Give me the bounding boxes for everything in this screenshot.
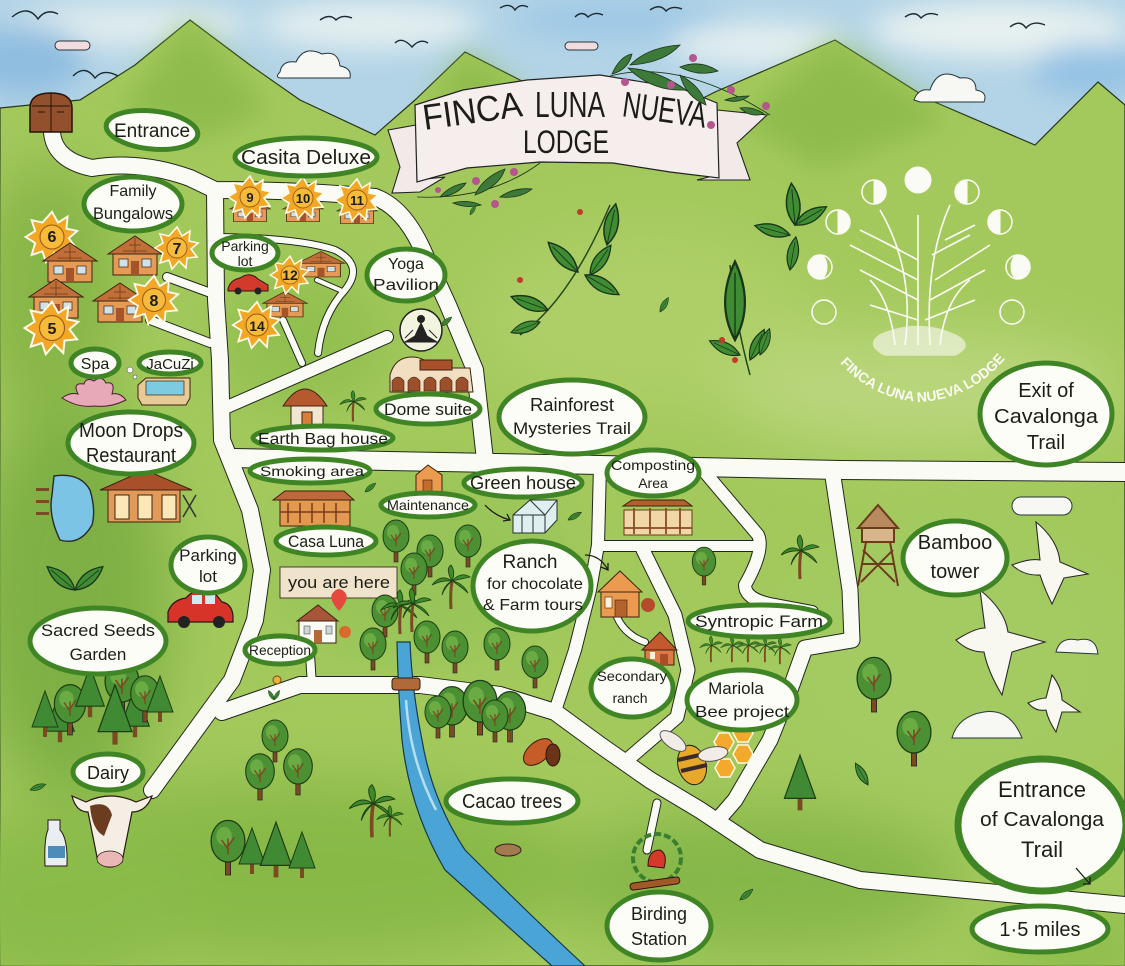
label: Mariola Bee project	[687, 670, 797, 730]
label: Cacao trees: Cacao trees	[462, 791, 562, 813]
label: Bamboo tower: Bamboo	[918, 532, 992, 554]
label: Ranch for chocolate and farm tours: Ranch	[503, 552, 557, 573]
label: Reception: Reception	[249, 642, 311, 658]
label: Secondary ranch	[591, 659, 673, 717]
you are here sign	[280, 567, 397, 611]
you are here sign: you are here	[288, 573, 390, 592]
label: Yoga Pavilion: Pavilion	[373, 277, 439, 294]
label: Earth Bag house	[253, 426, 393, 450]
bungalow numbers	[48, 229, 182, 338]
label: Green house: Green house	[470, 473, 576, 493]
label: Casa Luna: Casa Luna	[288, 532, 364, 551]
clouds and birds	[12, 5, 1098, 738]
label: Ranch for chocolate and farm tours: & Farm tours	[483, 597, 583, 614]
earth bag house	[283, 389, 366, 426]
label: Sacred Seeds Garden: Sacred Seeds	[41, 621, 155, 640]
label: Entrance of Cavalonga Trail: Trail	[1021, 837, 1063, 862]
family bungalows	[24, 212, 198, 354]
label: Bamboo tower: tower	[931, 561, 980, 583]
label: 1.5 miles: 1·5 miles	[999, 919, 1081, 941]
roads	[52, 132, 1125, 905]
secondary ranch house	[642, 632, 677, 665]
label: Parking lot	[171, 537, 245, 593]
label: Casita Deluxe	[235, 138, 377, 176]
banner leaves	[417, 45, 770, 208]
label: Maintenance: Maintenance	[387, 497, 469, 513]
label: Exit of Cavalonga Trail	[980, 363, 1112, 465]
label: Parking lot: lot	[199, 567, 217, 586]
right side trees	[784, 657, 931, 810]
botanical illustrations	[29, 183, 872, 902]
label: Smoking area: Smoking area	[260, 463, 364, 479]
greenhouse	[513, 500, 583, 533]
small rocks	[495, 844, 521, 856]
label: Entrance	[104, 106, 200, 154]
label: Mariola Bee project: Bee project	[695, 704, 790, 721]
label: Syntropic Farm	[688, 605, 830, 637]
dome suite	[390, 357, 473, 392]
label: Secondary ranch: ranch	[612, 690, 648, 706]
label: Moon Drops Restaurant: Restaurant	[86, 445, 176, 467]
casita deluxe cabins: 11	[350, 193, 364, 208]
dairy cow and bottle	[45, 796, 152, 867]
label: Mariola Bee project: Mariola	[708, 679, 764, 698]
label: Exit of Cavalonga Trail: Exit of	[1018, 380, 1074, 402]
label: Sacred Seeds Garden	[30, 608, 166, 674]
label: Dome suite	[376, 394, 480, 424]
label: Casita Deluxe: Casita Deluxe	[241, 147, 371, 169]
label: Rainforest Mysteries Trail: Rainforest	[530, 395, 614, 415]
label: Jacuzi	[139, 352, 201, 374]
bungalow numbers: 6	[48, 229, 57, 246]
label: Entrance of Cavalonga Trail: Entrance	[998, 777, 1086, 802]
label: Cacao trees	[446, 779, 578, 823]
label: Birding Station: Station	[631, 929, 687, 949]
jacuzzi	[127, 367, 190, 405]
red car small	[228, 275, 268, 294]
cabins 12 and 14: 12	[282, 267, 298, 283]
label: Earth Bag house: Earth Bag house	[258, 431, 388, 448]
small arrows	[485, 505, 1090, 884]
label: Yoga Pavilion: Yoga	[388, 256, 424, 273]
label: 1.5 miles	[972, 906, 1108, 952]
label: Parking lot upper: Parking	[221, 238, 269, 254]
label: Spa	[71, 349, 119, 377]
title text: NUEVA	[620, 83, 709, 136]
label: Bamboo tower	[903, 521, 1007, 595]
entrance gate icon	[30, 93, 72, 132]
small flower	[267, 676, 281, 701]
composting area hut	[623, 500, 692, 535]
label: Parking lot: Parking	[179, 546, 237, 565]
white moon-phase logo	[807, 166, 1031, 402]
forest in center	[360, 520, 548, 688]
label: Exit of Cavalonga Trail: Trail	[1027, 432, 1065, 454]
white birds	[956, 522, 1088, 732]
label: Smoking area	[250, 459, 370, 483]
label: Composting Area: Composting	[611, 457, 695, 473]
label: Reception	[245, 636, 315, 664]
label: Entrance of Cavalonga Trail	[958, 759, 1125, 891]
label: Dairy: Dairy	[87, 763, 129, 783]
casita deluxe cabins: 10	[296, 191, 310, 206]
label: Dairy	[73, 754, 143, 790]
label: Jacuzi: JaCuZi	[146, 356, 194, 373]
label: Birding Station	[607, 892, 711, 960]
title text: LODGE	[523, 124, 609, 160]
birding icon	[630, 834, 681, 890]
label: Composting Area: Area	[638, 475, 668, 491]
label: Yoga Pavilion	[367, 249, 445, 301]
casita deluxe cabins: 9	[246, 190, 254, 205]
label: Rainforest Mysteries Trail: Mysteries Trail	[513, 419, 631, 438]
casita deluxe cabins	[228, 176, 378, 224]
label: Family Bungalows: Bungalows	[93, 204, 173, 223]
label: Exit of Cavalonga Trail: Cavalonga	[994, 406, 1099, 428]
label: Family Bungalows	[84, 177, 182, 231]
title text	[420, 83, 709, 160]
label: Casa Luna	[276, 527, 376, 555]
label: Ranch for chocolate and farm tours	[473, 541, 591, 631]
title text: FINCA	[420, 83, 525, 138]
label: Entrance of Cavalonga Trail: of Cavalonga	[980, 809, 1105, 831]
bamboo tower	[858, 505, 898, 586]
label: Family Bungalows: Family	[109, 183, 157, 200]
yoga icon	[400, 309, 453, 351]
label: Ranch for chocolate and farm tours: for chocolate	[487, 576, 583, 593]
title text: LUNA	[535, 84, 605, 125]
ranch house	[598, 571, 655, 617]
label: Green house	[464, 469, 582, 497]
label: Sacred Seeds Garden: Garden	[70, 645, 126, 664]
river and bridge	[392, 642, 585, 966]
maintenance hut	[416, 465, 442, 494]
syntropic palms	[692, 535, 819, 664]
label: Entrance: Entrance	[114, 121, 190, 142]
label: Syntropic Farm: Syntropic Farm	[695, 612, 823, 631]
cabins 12 and 14: 14	[249, 318, 265, 334]
label: Maintenance	[381, 493, 475, 517]
sacred seeds garden trees	[32, 660, 173, 745]
bungalow numbers: 7	[173, 241, 182, 258]
label: Parking lot upper: lot	[238, 253, 252, 269]
label: Secondary ranch: Secondary	[597, 668, 667, 684]
lower left forest	[211, 720, 403, 878]
cacao trees and pods	[425, 680, 560, 771]
bungalow numbers: 5	[48, 321, 57, 338]
parking car large	[168, 590, 233, 628]
label: Parking lot upper	[212, 236, 278, 270]
bee and honeycomb	[657, 724, 753, 788]
reception house	[297, 605, 351, 643]
bungalow numbers: 8	[150, 293, 159, 310]
spa lotus	[62, 378, 126, 406]
label: Birding Station: Birding	[631, 904, 687, 924]
label: Moon Drops Restaurant	[68, 412, 194, 474]
label: Composting Area	[607, 450, 699, 496]
title banner	[388, 45, 770, 208]
label: Dome suite: Dome suite	[384, 400, 472, 419]
moon drops restaurant and pool	[36, 470, 196, 541]
white moon-phase logo: FINCA LUNA NUEVA LODGE	[840, 353, 1005, 402]
label: Moon Drops Restaurant: Moon Drops	[79, 420, 183, 442]
label: Rainforest Mysteries Trail	[499, 380, 645, 454]
label: Spa: Spa	[81, 356, 109, 373]
cabins 12 and 14	[233, 252, 345, 348]
casa luna building	[273, 481, 377, 526]
